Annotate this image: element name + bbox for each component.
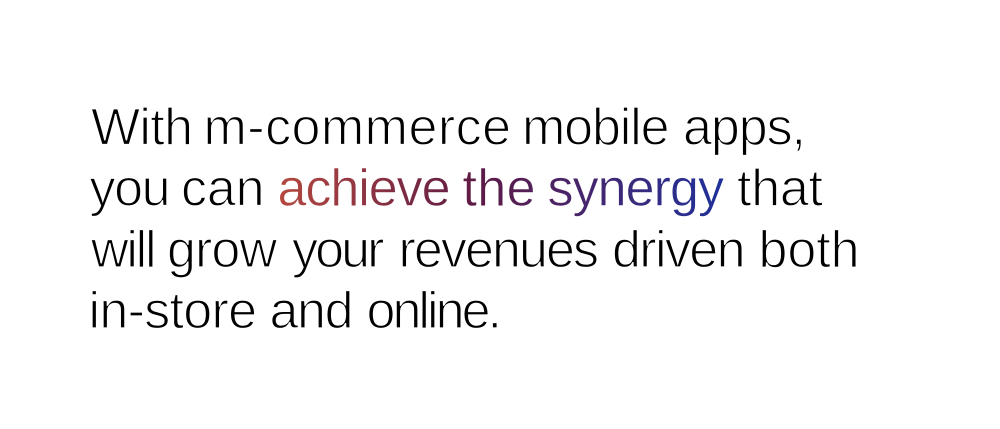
line 1: m-commerce <box>204 98 511 156</box>
line 3: revenues <box>398 221 599 279</box>
line 2: you <box>90 160 170 218</box>
line 1 <box>91 98 806 156</box>
line 2 <box>90 160 824 218</box>
line 4: online. <box>366 282 502 340</box>
line 3: your <box>292 221 384 279</box>
line 1: mobile <box>522 98 670 156</box>
line 4: in-store <box>88 282 257 340</box>
line 4 <box>88 282 502 340</box>
line 1: apps, <box>683 98 806 156</box>
line 4: and <box>270 282 354 340</box>
gradient highlight <box>278 160 724 218</box>
gradient highlight: the <box>462 160 536 218</box>
line 1: With <box>91 98 193 156</box>
gradient highlight: synergy <box>548 160 724 218</box>
line 3: will <box>90 221 156 279</box>
line 2: that <box>737 160 824 218</box>
line 3: grow <box>167 221 277 279</box>
line 3: both <box>758 221 860 279</box>
line 2: can <box>181 160 264 218</box>
gradient highlight: achieve <box>278 160 450 218</box>
line 3: driven <box>612 221 746 279</box>
line 3 <box>90 221 860 279</box>
